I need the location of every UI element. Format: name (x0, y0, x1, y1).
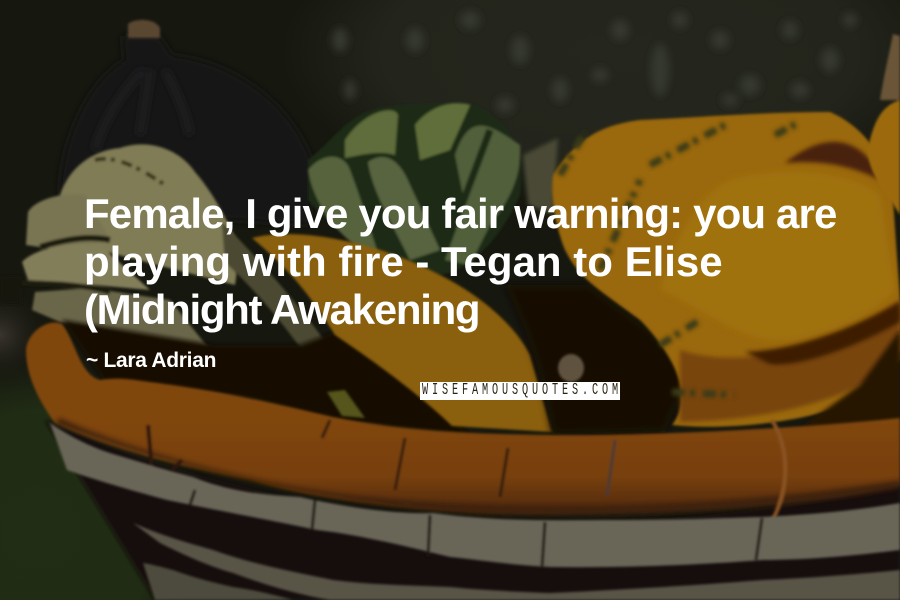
green striped squash (308, 103, 521, 275)
cream squash left (0, 144, 240, 350)
basket rim (26, 322, 900, 525)
pale green fruit at rim (327, 390, 365, 418)
big orange squash right (552, 112, 900, 428)
speckled stalk (222, 222, 338, 365)
quote text: (Midnight Awakening (84, 286, 479, 333)
dark hollow centre (505, 285, 690, 434)
basket base shadow (45, 420, 900, 600)
dark pumpkin (59, 20, 312, 225)
dark hollow under cream squash (62, 320, 470, 435)
far right squash (868, 34, 900, 215)
orange squash centre (252, 234, 552, 432)
quote text (84, 190, 837, 333)
knob (558, 354, 584, 382)
quote text: playing with fire - Tegan to Elise (84, 238, 723, 285)
mottled foliage dots (332, 11, 857, 113)
whitish squash sliver (523, 138, 558, 215)
basket woven stripes (50, 423, 900, 600)
author attribution: ~ Lara Adrian (86, 349, 216, 372)
quote text: Female, I give you fair warning: you are (84, 190, 837, 237)
